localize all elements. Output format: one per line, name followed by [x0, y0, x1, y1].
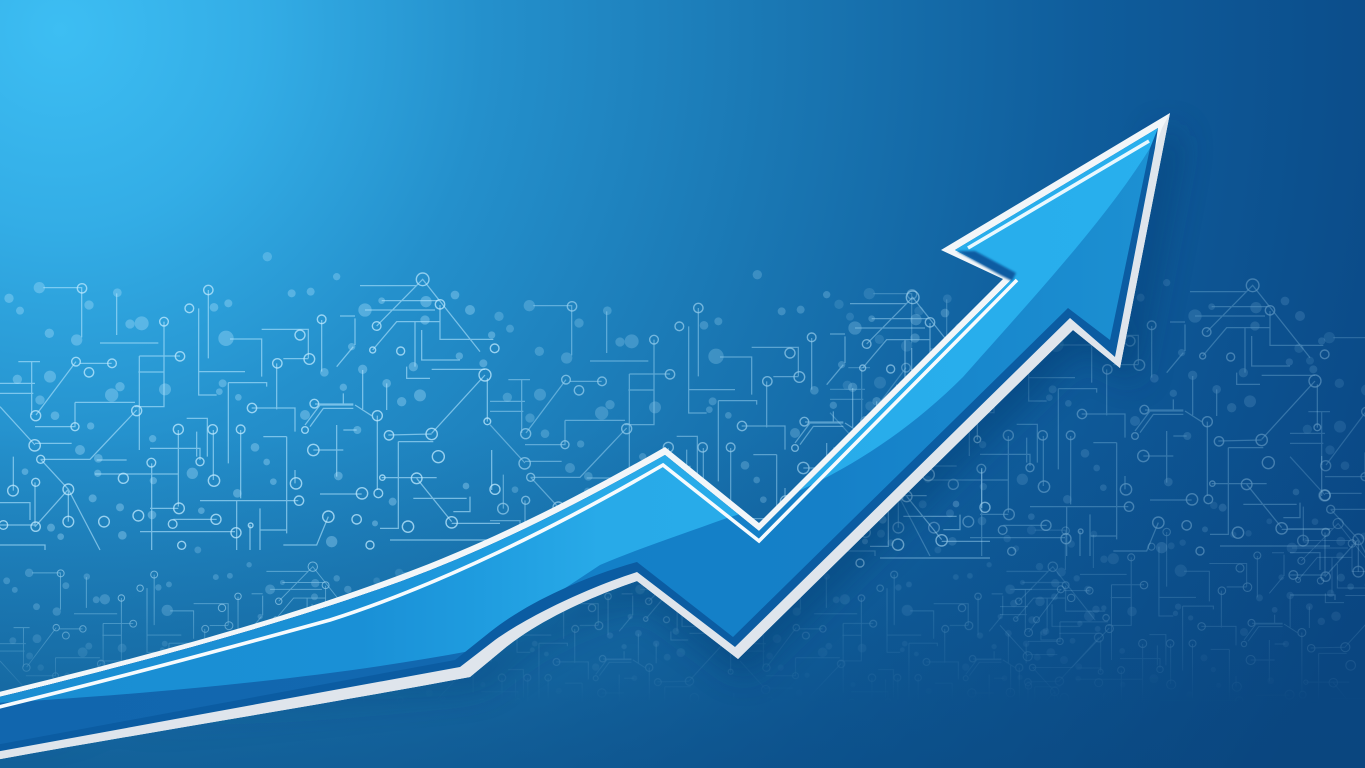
- arrow drop shadow: [0, 130, 1180, 740]
- arrow body shading: [0, 128, 1158, 744]
- notch shadow: [957, 251, 1016, 281]
- inner white line along shaft: [0, 280, 1017, 708]
- circuit network pattern: [0, 252, 1365, 689]
- arrow white outline: [0, 113, 1170, 760]
- arrow lower edge grey band: [0, 113, 1170, 760]
- arrow light highlight facet: [0, 100, 1175, 703]
- arrow darker underside: [0, 128, 1158, 744]
- inner white line on arrowhead: [968, 141, 1149, 248]
- arrow dark inner band: [0, 128, 1158, 752]
- rising arrow: [0, 100, 1195, 768]
